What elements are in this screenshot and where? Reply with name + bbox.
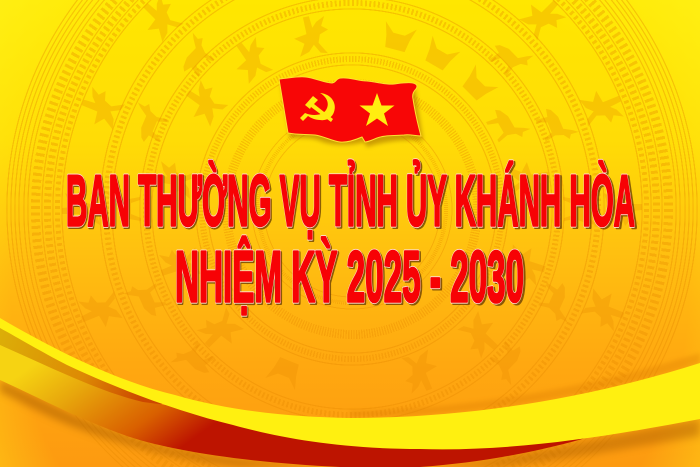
animals between middle rings <box>106 30 598 388</box>
icon: star <box>360 93 394 126</box>
swoosh shadow right <box>420 419 700 467</box>
shadow above yellow band on the right <box>350 353 700 417</box>
title <box>66 160 637 319</box>
figures between inner rings <box>152 13 552 397</box>
drum motifs: birds and animals <box>62 0 642 397</box>
wedge behind yellow band <box>0 320 175 408</box>
flag cloth <box>279 77 421 142</box>
yellow swoosh band <box>0 318 700 449</box>
outer ring birds <box>62 0 642 334</box>
swoosh shadow left <box>0 380 340 467</box>
title line 2 <box>175 236 526 319</box>
flag <box>279 77 423 147</box>
icon: hammer and sickle <box>300 93 335 122</box>
flag shadow <box>281 82 423 147</box>
red gradient band <box>0 345 650 467</box>
